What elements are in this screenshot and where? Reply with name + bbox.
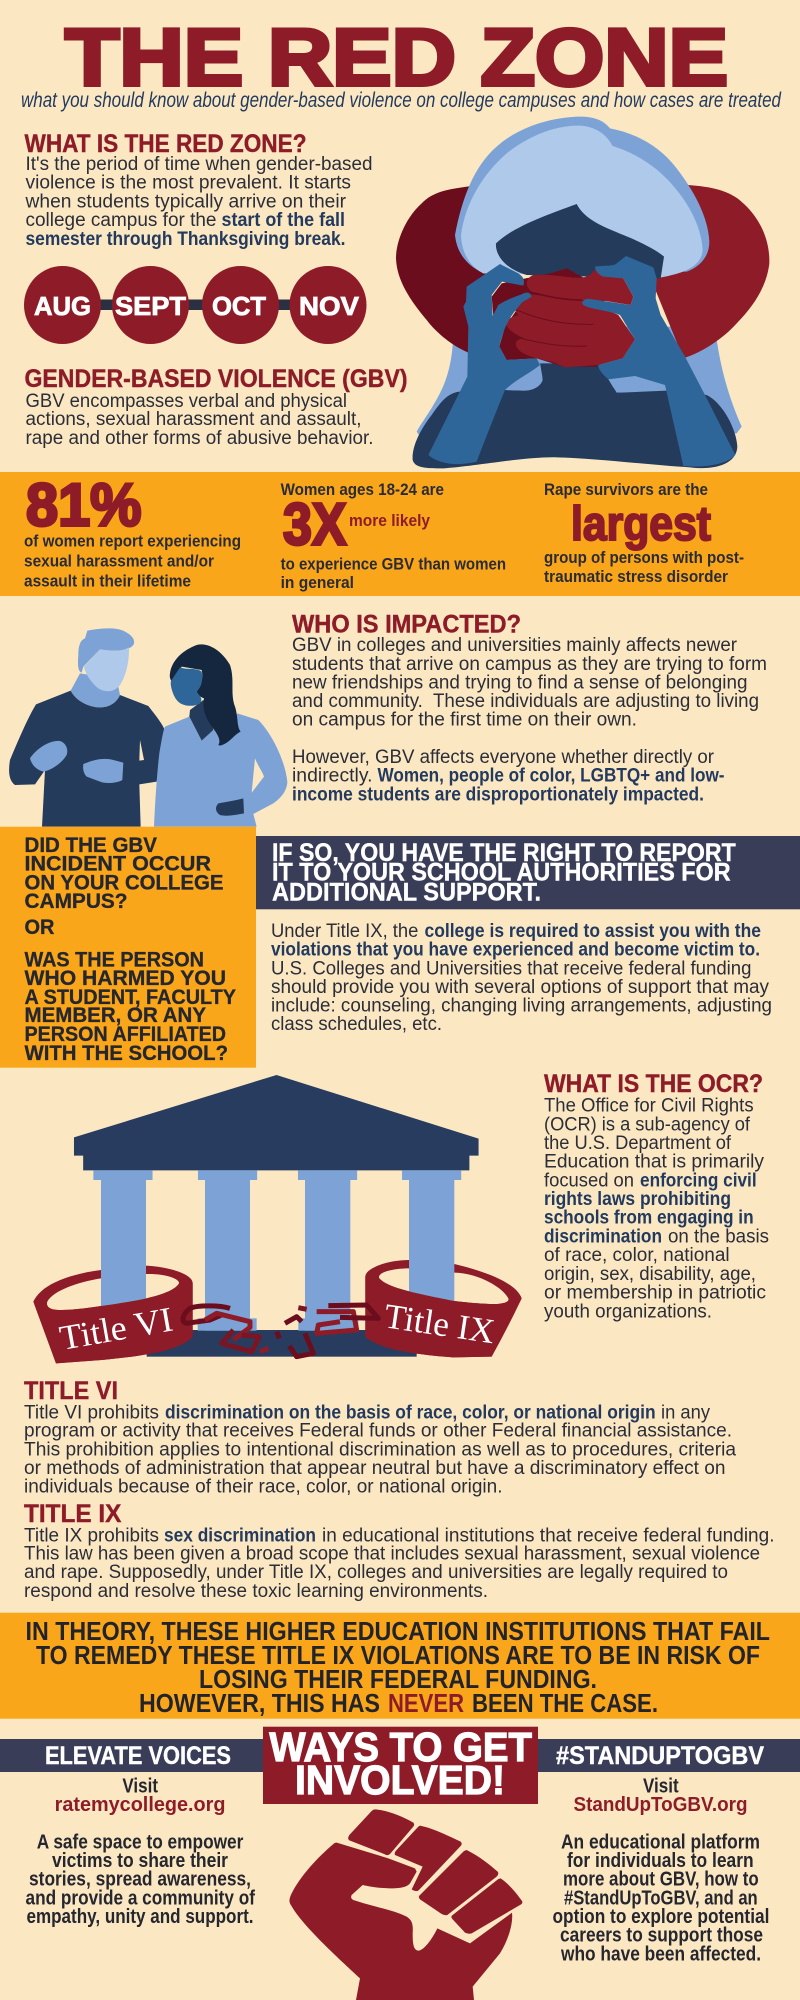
panel: who is impacted bbox=[292, 611, 767, 806]
panel: standuptogbv: option to explore potential bbox=[552, 1906, 769, 1928]
stat: 3x: to experience GBV than women bbox=[281, 554, 506, 574]
panel: ratemycollege: victims to share their bbox=[52, 1850, 228, 1872]
panel: gender-based violence bbox=[24, 365, 408, 449]
panel: what is the ocr bbox=[544, 1070, 769, 1322]
callout: federal funding bbox=[0, 1613, 800, 1719]
text block: red zone definition: college campus for the bbox=[26, 210, 216, 231]
text block: who is impacted: income students are disproportionately impacted. bbox=[292, 785, 704, 806]
timeline: months: SEPT bbox=[115, 291, 186, 321]
text block: gbv definition bbox=[26, 391, 374, 449]
stat: 3x: Women ages 18-24 are bbox=[281, 480, 444, 499]
panel: right to report banner: IT TO YOUR SCHOOL AUTHORITIES FOR bbox=[272, 859, 731, 887]
heading: title ix: TITLE IX bbox=[24, 1500, 122, 1528]
text block: title ix support bbox=[271, 921, 772, 1035]
heading: what is the red zone: WHAT IS THE RED ZONE? bbox=[24, 130, 306, 158]
panel: standuptogbv: Visit bbox=[643, 1776, 679, 1798]
text block: title ix support: college is required to assist you with the bbox=[424, 921, 761, 942]
text block: title vi: individuals because of their race, color, or national origin. bbox=[24, 1477, 502, 1498]
stat: 3x: more likely bbox=[349, 511, 430, 530]
text block: ocr definition: or membership in patriotic bbox=[544, 1283, 766, 1304]
panel: ratemycollege: empathy, unity and support. bbox=[26, 1906, 254, 1928]
stat: 81%: sexual harassment and/or bbox=[24, 551, 214, 570]
stat: largest: Rape survivors are the bbox=[544, 480, 708, 499]
label: elevate voices: ELEVATE VOICES bbox=[45, 1742, 231, 1770]
stat: largest: traumatic stress disorder bbox=[544, 567, 728, 586]
stat: largest bbox=[544, 480, 744, 586]
banner: section bar bbox=[0, 1739, 800, 1772]
panel: right to report banner: ADDITIONAL SUPPORT. bbox=[272, 878, 541, 906]
panel: standuptogbv: for individuals to learn bbox=[567, 1850, 754, 1872]
panel: ratemycollege: ratemycollege.org bbox=[55, 1794, 225, 1816]
stat: 81%: assault in their lifetime bbox=[24, 571, 191, 590]
text block: title vi: discrimination on the basis of race, color, or national origin bbox=[165, 1402, 656, 1423]
text block: title vi: Title VI prohibits bbox=[24, 1402, 159, 1423]
panel: did the incident occur: WHO HARMED YOU bbox=[24, 966, 226, 990]
text block: ocr definition: (OCR) is a sub-agency of bbox=[544, 1114, 751, 1135]
timeline: months: AUG bbox=[34, 291, 91, 321]
text block: ocr definition: the U.S. Department of bbox=[544, 1133, 732, 1154]
icon: raised fist bbox=[289, 1809, 522, 2000]
panel: right to report banner: IF SO, YOU HAVE THE RIGHT TO REPORT bbox=[272, 839, 736, 867]
heading: title vi: TITLE VI bbox=[24, 1377, 118, 1405]
timeline: months: OCT bbox=[212, 291, 266, 321]
heading: ways to get involved: INVOLVED! bbox=[295, 1757, 505, 1803]
text block: red zone definition: semester through Thanksgiving break. bbox=[26, 229, 346, 250]
text block: title ix: This law has been given a broad scope that includes sexual harassment, sexual violence bbox=[24, 1544, 760, 1565]
stat: largest: group of persons with post- bbox=[544, 548, 744, 567]
panel: did the incident occur: OR bbox=[24, 915, 55, 939]
heading: what is the ocr: WHAT IS THE OCR? bbox=[544, 1070, 763, 1098]
panel: right to report banner bbox=[256, 836, 800, 909]
stat: 3x bbox=[281, 480, 506, 592]
panel: standuptogbv: more about GBV, how to bbox=[563, 1869, 759, 1891]
heading: gender-based violence: GENDER-BASED VIOLENCE (GBV) bbox=[24, 365, 408, 393]
text block: title ix: respond and resolve these toxic learning environments. bbox=[24, 1581, 488, 1602]
text block: title ix support: U.S. Colleges and Universities that receive federal funding bbox=[271, 958, 752, 979]
text block: title ix: in educational institutions that receive federal funding. bbox=[322, 1526, 774, 1547]
callout: federal funding: HOWEVER, THIS HAS bbox=[139, 1690, 380, 1718]
text block: ocr definition: schools from engaging in bbox=[544, 1208, 754, 1229]
text block: ocr definition: discrimination bbox=[544, 1226, 662, 1247]
panel: statistics band bbox=[0, 472, 800, 596]
panel: did the incident occur: WITH THE SCHOOL? bbox=[24, 1041, 228, 1065]
heading: ways to get involved: WAYS TO GET bbox=[269, 1724, 532, 1770]
text block: red zone definition: It's the period of time when gender-based bbox=[26, 154, 372, 175]
text block: who is impacted bbox=[292, 635, 767, 806]
text block: ocr definition: of race, color, national bbox=[544, 1245, 730, 1266]
illustration: building with broken shackles bbox=[33, 1075, 522, 1363]
text block: who is impacted: GBV in colleges and universities mainly affects newer bbox=[292, 635, 738, 656]
panel: title ix bbox=[24, 1500, 774, 1602]
panel: did the incident occur bbox=[0, 827, 256, 1068]
title: THE RED ZONE bbox=[65, 13, 728, 103]
text block: gbv definition: rape and other forms of abusive behavior. bbox=[26, 428, 374, 449]
panel: ratemycollege: A safe space to empower bbox=[37, 1831, 244, 1853]
text block: red zone definition: start of the fall bbox=[222, 210, 345, 231]
heading: ways to get involved bbox=[263, 1724, 538, 1804]
stat: 81%: of women report experiencing bbox=[24, 532, 241, 550]
panel: did the incident occur: ON YOUR COLLEGE bbox=[24, 870, 224, 894]
text block: gbv definition: GBV encompasses verbal and physical bbox=[26, 391, 347, 412]
panel: did the incident occur: WAS THE PERSON bbox=[24, 947, 204, 971]
text block: ocr definition: focused on bbox=[544, 1170, 634, 1191]
panel: what is the red zone bbox=[24, 130, 373, 250]
panel: standuptogbv: #StandUpToGBV, and an bbox=[564, 1887, 758, 1909]
label: title vi: Title VI bbox=[57, 1300, 176, 1358]
text block: title vi: program or activity that receives Federal funds or other Federal financial assistance. bbox=[24, 1421, 732, 1442]
illustration: woman covering her mouth bbox=[396, 117, 769, 468]
stat: 81%: 81% bbox=[26, 472, 142, 538]
text block: ocr definition: The Office for Civil Rights bbox=[544, 1096, 754, 1117]
panel: standuptogbv: An educational platform bbox=[561, 1831, 760, 1853]
panel: ratemycollege: stories, spread awareness, bbox=[29, 1869, 251, 1891]
panel: did the incident occur: MEMBER, OR ANY bbox=[24, 1003, 206, 1027]
label: title ix: Title IX bbox=[382, 1296, 497, 1351]
text block: red zone definition: violence is the most prevalent. It starts bbox=[26, 172, 351, 194]
panel: ratemycollege: Visit bbox=[122, 1776, 158, 1798]
text block: title ix support: should provide you with several options of support that may bbox=[271, 977, 769, 998]
panel: ratemycollege: and provide a community of bbox=[26, 1887, 255, 1909]
text block: title ix: sex discrimination bbox=[164, 1526, 316, 1547]
panel: standuptogbv bbox=[552, 1776, 769, 1965]
text block: ocr definition bbox=[544, 1096, 769, 1322]
heading: who is impacted: WHO IS IMPACTED? bbox=[292, 611, 521, 639]
text block: ocr definition: rights laws prohibiting bbox=[544, 1189, 731, 1210]
text block: title vi: or methods of administration that appear neutral but have a discriminatory effect on bbox=[24, 1458, 726, 1479]
text block: title ix: and rape. Supposedly, under Title IX, colleges and universities are legally required to bbox=[24, 1562, 728, 1583]
text block: title ix bbox=[24, 1526, 774, 1602]
panel: standuptogbv: StandUpToGBV.org bbox=[574, 1794, 748, 1816]
text block: ocr definition: youth organizations. bbox=[544, 1301, 712, 1322]
text block: ocr definition: on the basis bbox=[668, 1226, 769, 1247]
illustration: two students bbox=[9, 628, 287, 827]
text block: title vi: in any bbox=[661, 1402, 710, 1423]
text block: ocr definition: Education that is primarily bbox=[544, 1152, 764, 1173]
panel: did the incident occur: PERSON AFFILIATED bbox=[24, 1022, 226, 1046]
panel: did the incident occur: DID THE GBV bbox=[24, 833, 158, 857]
text block: title ix support: Under Title IX, the bbox=[271, 921, 418, 942]
text block: who is impacted: students that arrive on campus as they are trying to form bbox=[292, 654, 767, 675]
stat: 3x: 3X bbox=[283, 492, 346, 558]
callout: federal funding: BEEN THE CASE. bbox=[472, 1690, 658, 1718]
label: stand up to gbv: #STANDUPTOGBV bbox=[556, 1742, 764, 1770]
text block: who is impacted: new friendships and trying to find a sense of belonging bbox=[292, 672, 748, 694]
text block: who is impacted: on campus for the first time on their own. bbox=[292, 710, 637, 731]
panel: standuptogbv: who have been affected. bbox=[560, 1943, 761, 1965]
stat: largest: largest bbox=[571, 498, 711, 551]
stat: 3x: in general bbox=[281, 573, 354, 592]
callout: federal funding: LOSING THEIR FEDERAL FUNDING. bbox=[199, 1666, 597, 1694]
text block: title ix support: include: counseling, changing living arrangements, adjusting bbox=[271, 996, 772, 1016]
text block: who is impacted: However, GBV affects everyone whether directly or bbox=[292, 747, 715, 768]
text block: who is impacted: Women, people of color, LGBTQ+ and low- bbox=[378, 766, 724, 786]
text block: who is impacted: indirectly. bbox=[292, 766, 372, 786]
timeline: months bbox=[24, 266, 366, 344]
panel: title vi bbox=[24, 1377, 736, 1498]
text block: red zone definition bbox=[24, 154, 373, 250]
stat: 81% bbox=[24, 472, 241, 590]
panel: did the incident occur: INCIDENT OCCUR bbox=[24, 852, 211, 876]
text block: ocr definition: enforcing civil bbox=[640, 1170, 757, 1191]
text block: title ix support: class schedules, etc. bbox=[271, 1014, 442, 1035]
text block: who is impacted: and community. These individuals are adjusting to living bbox=[292, 691, 759, 712]
callout: federal funding: NEVER bbox=[388, 1690, 464, 1718]
panel: ratemycollege bbox=[26, 1776, 255, 1928]
text block: title ix: Title IX prohibits bbox=[24, 1526, 159, 1547]
text block: title vi bbox=[24, 1402, 736, 1498]
panel: did the incident occur: CAMPUS? bbox=[24, 889, 128, 913]
panel: standuptogbv: careers to support those bbox=[560, 1925, 763, 1947]
timeline: months: NOV bbox=[299, 291, 360, 321]
text block: red zone definition: when students typically arrive on their bbox=[24, 192, 347, 212]
text block: title ix support: violations that you have experienced and become victim to. bbox=[271, 940, 760, 961]
text block: title vi: This prohibition applies to intentional discrimination as well as to procedures, criteria bbox=[24, 1439, 736, 1460]
text block: gbv definition: actions, sexual harassment and assault, bbox=[26, 409, 362, 430]
text block: ocr definition: origin, sex, disability, age, bbox=[544, 1264, 756, 1285]
panel: did the incident occur: A STUDENT, FACULTY bbox=[24, 985, 236, 1009]
